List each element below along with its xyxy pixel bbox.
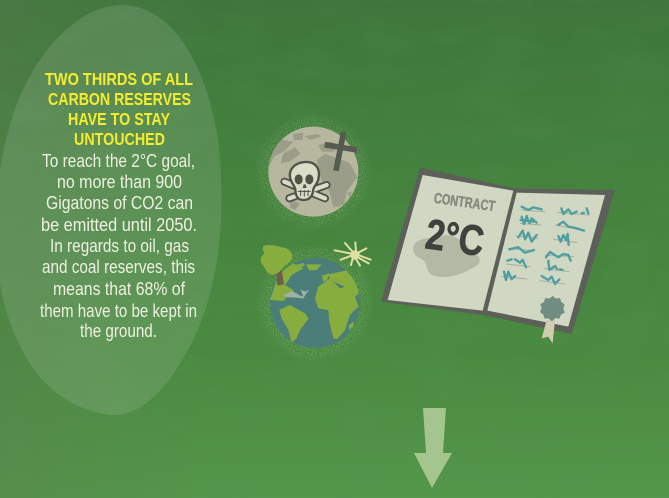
heading: CARBON RESERVES	[48, 89, 191, 109]
signature lines	[502, 210, 590, 284]
body text: them have to be kept in	[40, 301, 197, 321]
stain under temperature	[413, 235, 480, 277]
body text: and coal reserves, this	[42, 257, 195, 277]
body text: be emitted until 2050.	[41, 215, 197, 235]
body text: the ground.	[80, 321, 157, 341]
icon: seal with ribbon	[540, 296, 565, 343]
body text: means that 68% of	[53, 279, 186, 299]
heading: UNTOUCHED	[74, 129, 165, 149]
left page	[388, 175, 513, 311]
icon: whale	[283, 290, 309, 298]
signatures	[504, 207, 588, 284]
icon: healthy earth with tree and sun	[255, 242, 375, 363]
body text	[40, 151, 197, 341]
body text: Gigatons of CO2 can	[46, 193, 193, 213]
icon: dead moon-like earth with skull and cross	[254, 112, 373, 231]
contract label: CONTRACT	[433, 191, 496, 215]
heading: TWO THIRDS OF ALL	[45, 69, 193, 89]
body text: no more than 900	[57, 172, 182, 192]
body text: To reach the 2°C goal,	[42, 151, 195, 171]
body text: In regards to oil, gas	[50, 236, 189, 256]
icon: contract booklet	[381, 167, 615, 343]
icon: skull and crossbones	[284, 162, 327, 200]
heading: HAVE TO STAY	[68, 109, 170, 129]
panel: translucent oval text backdrop	[0, 5, 222, 415]
icon: cross	[325, 132, 357, 171]
right page	[487, 193, 605, 327]
icon: tree	[261, 245, 292, 286]
arrow pointing down	[414, 408, 452, 488]
icon: sun	[335, 242, 371, 266]
heading	[45, 69, 193, 149]
temperature label: 2°C	[423, 210, 487, 266]
